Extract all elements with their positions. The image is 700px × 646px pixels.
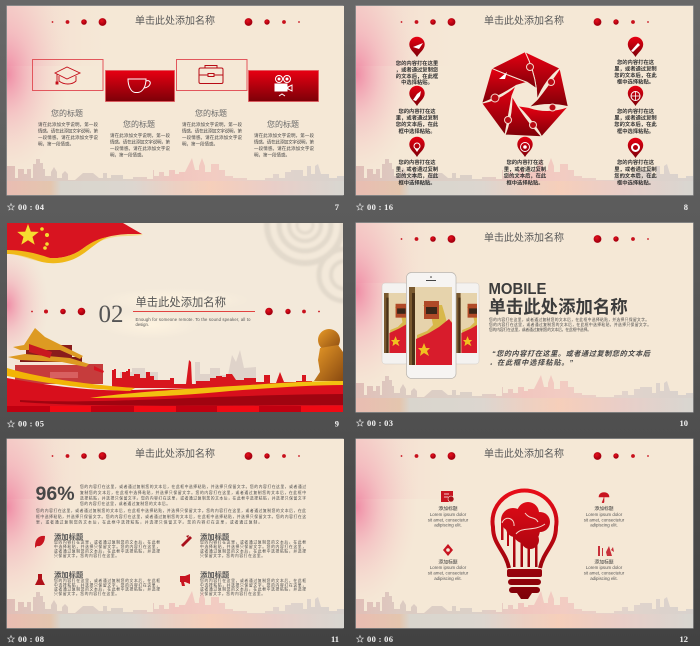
block: bottom left <box>54 570 160 596</box>
column text 2 <box>110 119 170 158</box>
column text 1 <box>38 108 98 148</box>
body paragraph <box>489 317 651 332</box>
text: upper left: 添加标题 <box>438 505 458 512</box>
panel: slide 8 <box>294 0 694 196</box>
column text 4: 您的标题 <box>267 119 299 129</box>
block: bottom left: 中选择粘贴，并选择只保留文字。您的内容打在这里， <box>54 582 160 588</box>
text: upper right: 添加标题 <box>594 505 614 512</box>
block: top left: 或者通过复制您的文本后，在此框中选择粘贴，并选择 <box>54 548 160 554</box>
column text 3: 请在此添加文字说明，第一段 <box>182 121 242 128</box>
block: bottom right: 只保留文字。您的内容打在这里。 <box>200 591 265 596</box>
text: middle left: 您的文本后，在此 <box>396 120 439 128</box>
red box with film camera icon <box>248 70 318 102</box>
pin: bottom right <box>628 138 643 158</box>
block: top right: 您的内容打在这里，或者通过复制您的文本后，在此框 <box>200 540 306 544</box>
column text 4: 情感。请在此添加文字说明，第 <box>254 138 314 146</box>
text: upper left: adipiscing elit. <box>434 522 462 528</box>
text: upper right: sit amet, consectetur <box>584 518 625 522</box>
second paragraph: 里，或者通过复制您的文本后，在此框中选择粘贴，并选择只保留文字。您的内容打在这里，或者通过复制。 <box>36 520 262 524</box>
text: middle left: 里，或者通过复制 <box>396 114 438 122</box>
text: lower right <box>584 558 625 581</box>
intro paragraph: 您的内容打在这里，或者通过复制您的文本后。 <box>80 501 170 506</box>
footer slide 8 <box>357 202 688 212</box>
text: upper right: adipiscing elit. <box>590 522 618 528</box>
pinwheel heptagon diagram <box>482 52 568 137</box>
block: top right: 只保留文字。您的内容打在这里。 <box>200 553 265 558</box>
text: middle right: 里，或者通过复制 <box>614 114 657 122</box>
block: top left: 您的内容打在这里，或者通过复制您的文本后，在此框 <box>54 540 160 544</box>
footer slide 9: 9 <box>335 418 339 428</box>
panel: slide 11 stats <box>0 402 344 628</box>
text: upper left: sit amet, consectetur <box>428 518 469 522</box>
text: bottom left: 里，或者通过复制 <box>396 165 438 173</box>
column text 1: 请在此添加文字说明，第一段 <box>38 121 98 128</box>
text: bottom left: 框中选择粘贴。 <box>398 178 436 186</box>
text: middle right: 您的内容打在这 <box>617 107 655 115</box>
text: bottom right <box>614 158 657 186</box>
text: top left: 您的内容打在这里 <box>396 59 439 67</box>
block: bottom left: 添加标题 <box>54 570 84 580</box>
footer slide 9 <box>8 418 339 428</box>
text: lower left <box>428 558 469 581</box>
slide 8 title: 单击此处添加名称 <box>484 14 564 27</box>
ribbon waves <box>7 368 343 412</box>
text: lower left: Lorem ipsum dolor <box>430 565 467 570</box>
slide 7 title: 单击此处添加名称 <box>135 14 215 27</box>
outlined box with graduation cap icon <box>32 60 103 90</box>
footer slide 7: 00 : 04 <box>18 202 45 212</box>
intro paragraph: 复制您的文本后，在此框中选择粘贴，并选择只保留文字。您的内容打在这里，或者通过复制您的文本后，在此框中 <box>80 490 306 495</box>
footer slide 10: 10 <box>680 418 688 428</box>
decorative swirl <box>264 223 343 304</box>
dots row <box>31 308 320 315</box>
text: bottom centre: 您的文本后，在此 <box>504 172 547 180</box>
block: top left: 只保留文字。您的内容打在这里。 <box>54 553 119 558</box>
block: bottom left: 或者通过复制您的文本后，在此框中选择粘贴，并选择 <box>54 586 160 592</box>
section subtitle <box>136 317 251 327</box>
text: top right <box>614 58 657 86</box>
text: middle right: 框中选择粘贴。 <box>617 127 654 135</box>
column text 4 <box>254 119 314 158</box>
footer slide 7: 7 <box>335 202 340 212</box>
text: bottom centre: 您的内容打在这 <box>506 158 544 166</box>
slide 11 title: 单击此处添加名称 <box>135 447 215 460</box>
footer slide 12: 00 : 06 <box>367 634 393 644</box>
text: top left: ，或者通过复制您 <box>396 66 439 74</box>
panel: slide 7 <box>0 0 344 196</box>
footer slide 11: 00 : 08 <box>18 634 44 644</box>
red city skyline <box>112 360 312 388</box>
column text 2: 情感。请在此添加文字说明，第 <box>110 138 170 146</box>
text: bottom left <box>396 158 439 186</box>
block: top left: 添加标题 <box>54 532 84 542</box>
text: middle right <box>614 107 657 135</box>
text: bottom right: 您的内容打在这 <box>617 158 655 166</box>
section subtitle: Enough for someone remote. To the sound speaker, all to <box>136 317 251 322</box>
panel: slide 9 section divider <box>7 223 343 412</box>
text: lower left: sit amet, consectetur <box>428 570 469 576</box>
phone right <box>456 282 480 364</box>
text: upper left <box>428 505 469 528</box>
block: bottom right: 中选择粘贴，并选择只保留文字。您的内容打在这里， <box>200 582 306 588</box>
pin: top right <box>628 37 643 57</box>
block: bottom right: 添加标题 <box>200 570 230 580</box>
second paragraph: 框中选择粘贴，并选择只保留文字。您的内容打在这里，或者通过复制您的文本后，在此框中选择粘贴，并选择只保留文字。您的内容打在这 <box>36 514 306 519</box>
intro paragraph: 选择粘贴，并选择只保留文字。您的内容打在这里，或者通过复制您的文本后，在此框中选择粘贴，并选择只保留文字 <box>80 496 306 500</box>
text: middle left <box>396 107 439 135</box>
column text 3: 您的标题 <box>195 108 227 118</box>
block: top right <box>200 532 306 558</box>
section title: 单击此处添加名称 <box>136 295 226 309</box>
column text 2: 请在此添加文字说明，第一段 <box>110 132 170 139</box>
red box with coffee cup icon <box>106 70 174 102</box>
second paragraph: 您的内容打在这里，或者通过复制您的文本后，在此框中选择粘贴，并选择只保留文字。您的内容打在这里，或者通过复制您的文本后，在此 <box>36 508 306 513</box>
text: bottom centre <box>504 158 547 186</box>
slide 12 title: 单击此处添加名称 <box>484 447 564 460</box>
text: lower left: adipiscing elit. <box>434 576 462 581</box>
column text 1: 一段情感。请在此添加文字说 <box>38 134 98 141</box>
block: top left: 中选择粘贴，并选择只保留文字。您的内容打在这里， <box>54 544 160 549</box>
quote: ．在此框中选择粘贴。” <box>489 358 573 367</box>
footer slide 7 <box>8 202 340 212</box>
body paragraph: 您的内容打在这里，或者通过复制您的文本后，在此框中选择。 <box>489 327 591 332</box>
big number 96%: 96% <box>36 483 75 505</box>
pin: middle left <box>409 86 425 106</box>
text: bottom left: 您的内容打在这 <box>398 158 436 166</box>
pin: top left <box>409 37 425 57</box>
intro paragraph <box>80 484 306 506</box>
block: bottom right: 或者通过复制您的文本后，在此框中选择粘贴，并选择 <box>200 586 306 592</box>
text: top left: 的文本后，在此框 <box>396 72 439 80</box>
column text 1: 明，第一段情感。 <box>38 140 74 148</box>
text: upper left: Lorem ipsum dolor <box>430 512 467 517</box>
block: top right: 或者通过复制您的文本后，在此框中选择粘贴，并选择 <box>200 548 306 554</box>
column text 2: 一段情感。请在此添加文字说 <box>110 145 170 152</box>
footer slide 10 <box>357 418 688 428</box>
text: top right: 里，或者通过复制 <box>614 64 657 72</box>
column text 3: 情感。请在此添加文字说明，第 <box>182 128 242 134</box>
heading Chinese: 单击此处添加名称 <box>488 297 628 317</box>
text: bottom right: 框中选择粘贴。 <box>617 178 654 186</box>
icon: leaf <box>35 536 45 548</box>
block: bottom right <box>200 570 306 596</box>
body paragraph: 您的内容打在这里，或者通过复制您的文本后，在此框中选择粘贴，并选择只保留文字。 <box>489 322 651 327</box>
column text 3: 一段情感。请在此添加文字说 <box>182 134 242 141</box>
section number: 02 <box>98 301 124 328</box>
body paragraph: 您的内容打在这里，或者通过复制您的文本后，在此框中选择粘贴，并选择只保留文字。 <box>489 317 649 322</box>
footer slide 10: 00 : 03 <box>367 418 393 428</box>
column text 4: 请在此添加文字说明，第一段 <box>254 132 314 139</box>
footer slide 11: 11 <box>331 634 339 644</box>
footer slide 9: 00 : 05 <box>18 418 44 428</box>
heading MOBILE: MOBILE <box>488 281 546 298</box>
gate tower <box>8 328 104 384</box>
light bulb with brain <box>493 491 556 599</box>
phone centre <box>406 272 456 378</box>
pin: middle right <box>628 86 643 106</box>
block: top left <box>54 532 160 558</box>
column text 3 <box>182 108 242 148</box>
text: upper right <box>584 505 625 528</box>
flag <box>7 223 143 263</box>
text: lower right: adipiscing elit. <box>590 576 618 581</box>
text: top right: 您的文本后，在此 <box>614 71 657 79</box>
panel: slide 12 light bulb <box>294 402 694 628</box>
footer slide 8: 8 <box>684 202 688 212</box>
icon: calendar <box>441 491 454 502</box>
section subtitle: design. <box>136 322 149 327</box>
column text 3: 明，第一段情感。 <box>182 140 218 148</box>
text: top left <box>396 59 439 86</box>
intro paragraph: 您的内容打在这里，或者通过复制您的文本后，在此框中选择粘贴，并选择只保留文字。您的内容打在这里，或者通过 <box>80 484 306 489</box>
title rule <box>133 311 255 312</box>
phone left <box>382 282 406 364</box>
footer slide 12 <box>357 634 688 644</box>
text: lower right: 添加标题 <box>594 558 614 566</box>
icon: umbrella <box>599 492 609 503</box>
footer slide 12: 12 <box>680 634 688 644</box>
footer slide 11 <box>8 634 339 644</box>
icon: megaphone <box>180 574 190 586</box>
column text 2: 您的标题 <box>123 119 155 129</box>
slide 10 title: 单击此处添加名称 <box>484 231 564 244</box>
text: lower right: Lorem ipsum dolor <box>586 565 623 570</box>
text: top left: 中选择粘贴。 <box>401 78 433 86</box>
block: bottom left: 只保留文字。您的内容打在这里。 <box>54 591 119 596</box>
text: bottom centre: 里，或者通过复制 <box>504 165 546 173</box>
text: bottom right: 您的文本后，在此 <box>614 172 657 180</box>
icon: chart <box>598 546 614 556</box>
column text 1: 您的标题 <box>51 108 83 118</box>
grey city skyline <box>120 350 256 385</box>
pin: bottom left <box>409 137 425 157</box>
column text 1: 情感。请在此添加文字说明，第 <box>38 128 98 134</box>
text: middle right: 您的文本后，在此 <box>614 120 657 128</box>
text: lower left: 添加标题 <box>438 558 458 566</box>
icon: magic wand <box>181 535 192 547</box>
icon: flask <box>35 574 45 585</box>
column text 4: 明，第一段情感。 <box>254 152 290 158</box>
text: bottom left: 您的文本后，在此 <box>396 172 439 180</box>
block: bottom left: 您的内容打在这里，或者通过复制您的文本后，在此框 <box>54 578 160 583</box>
block: top right: 中选择粘贴，并选择只保留文字。您的内容打在这里， <box>200 544 306 549</box>
text: upper right: Lorem ipsum dolor <box>586 512 623 517</box>
column text 4: 一段情感。请在此添加文字说 <box>254 145 314 152</box>
quote <box>489 349 651 367</box>
text: middle left: 框中选择粘贴。 <box>398 127 436 135</box>
outlined box with briefcase icon <box>176 60 247 90</box>
panel: slide 10 mobile <box>356 222 694 412</box>
text: bottom right: 里，或者通过复制 <box>614 165 657 173</box>
icon: gear target <box>443 544 453 556</box>
text: top right: 框中选择粘贴。 <box>617 78 654 86</box>
second paragraph <box>36 508 306 524</box>
block: top right: 添加标题 <box>200 532 230 542</box>
text: middle left: 您的内容打在这 <box>398 107 436 115</box>
quote: “您的内容打在这里。或者通过复制您的文本后 <box>492 349 651 358</box>
footer slide 8: 00 : 16 <box>367 202 393 212</box>
text: lower right: sit amet, consectetur <box>584 570 625 576</box>
column text 2: 明，第一段情感。 <box>110 152 146 158</box>
block: bottom right: 您的内容打在这里，或者通过复制您的文本后，在此框 <box>200 578 306 583</box>
text: bottom centre: 框中选择粘贴。 <box>506 178 544 186</box>
pin: bottom centre <box>517 137 533 157</box>
lion statue <box>314 329 343 381</box>
text: top right: 您的内容打在这 <box>617 58 655 66</box>
